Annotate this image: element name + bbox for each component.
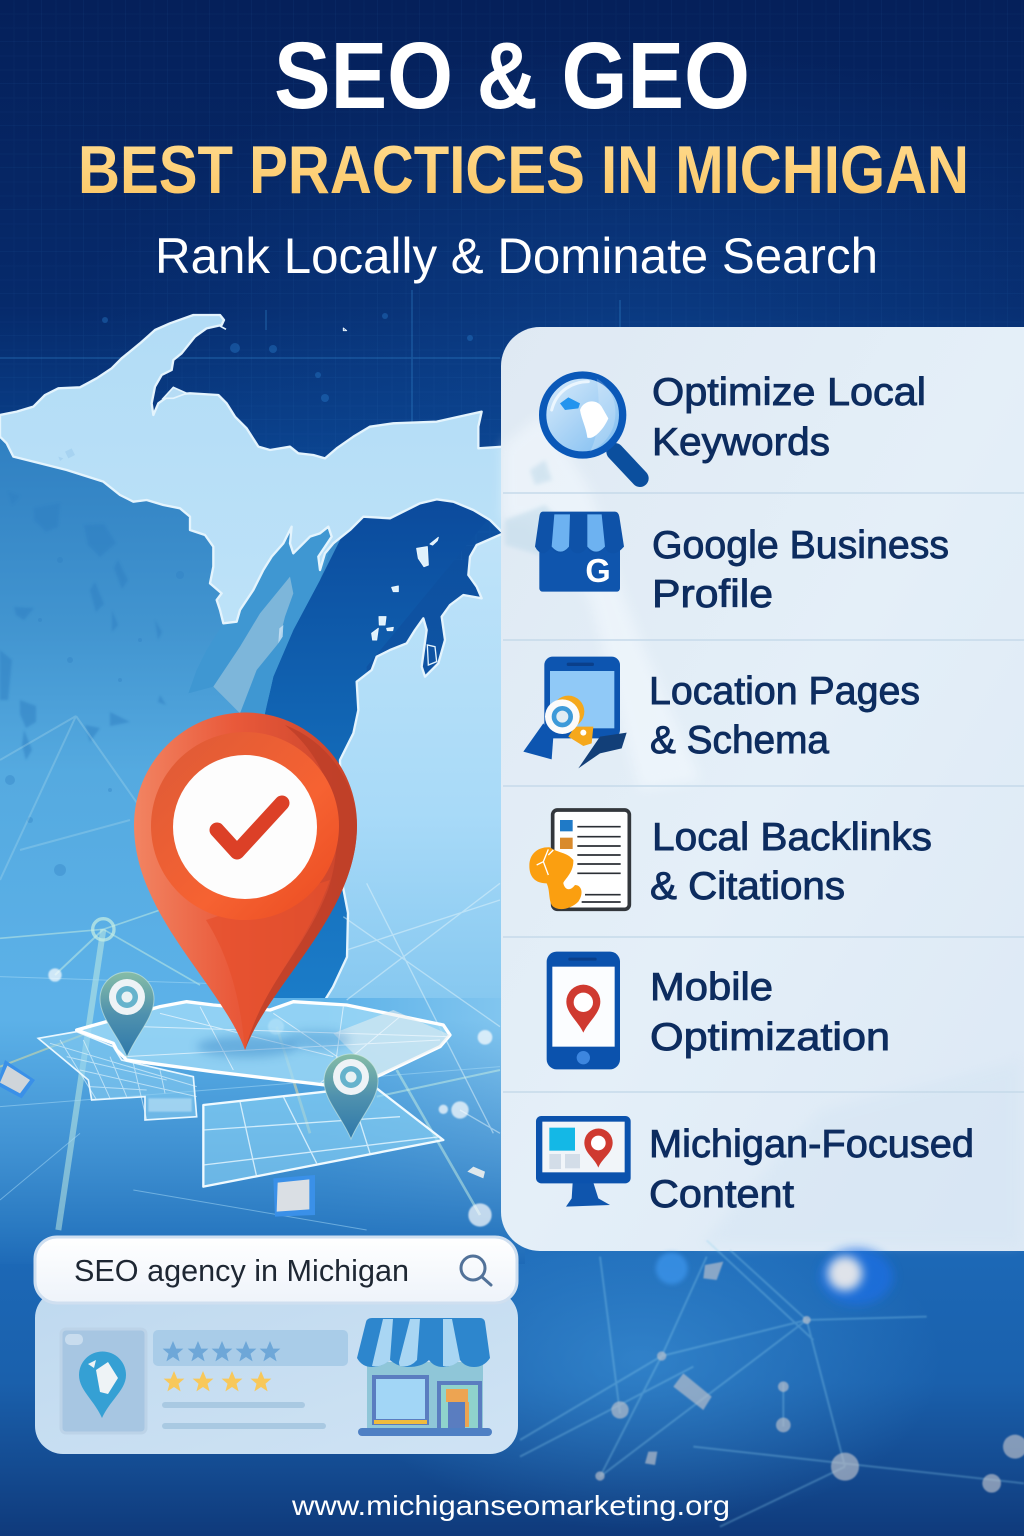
faint triangle lines on left land [0,716,170,880]
small pin: west [100,972,154,1057]
map: lake islands [343,328,438,640]
label: optimize local keywords [652,371,926,464]
small pin: east [324,1054,378,1139]
label: optimize local keywords: Optimize Local [652,371,926,414]
map: upper peninsula of Michigan [0,315,503,623]
placeholder text lines [162,1402,326,1429]
parcel: south grid [203,1088,443,1187]
search bar [35,1237,517,1303]
icon: document with orange map [529,810,629,909]
label: local backlinks and citations: Local Backlinks [652,816,932,859]
left land region below the upper peninsula [0,430,345,1002]
parcel: west grid [38,1032,197,1120]
bottom network decoration [520,1240,1024,1527]
title: SEO & GEO [274,23,750,129]
icon: smartphone with map pin [547,952,620,1069]
search bar: SEO agency in Michigan [74,1253,409,1288]
panel: best practices list [501,327,1024,1251]
blue rating stars [163,1341,280,1361]
large red map pin with check mark [134,712,357,1050]
icon: magnifying glass over map [543,375,640,478]
search result card [35,1290,518,1454]
icon: desktop monitor with map pin [536,1116,631,1207]
map: lower peninsula of Michigan [325,533,503,1000]
thumbnail with globe pin [61,1329,146,1433]
label: google business profile [652,524,949,616]
icon: google business store [535,512,624,592]
parcel: main highlighted area [77,1002,450,1085]
tagline: Rank Locally & Dominate Search [155,228,878,284]
label: location pages and schema: Location Pages [649,670,920,713]
lower map surface [0,998,525,1264]
icon: storefront [357,1318,492,1436]
label: michigan-focused content: Content [649,1173,794,1216]
lake michigan water [188,497,507,1000]
label: mobile optimization [650,966,890,1059]
label: location pages and schema: & Schema [650,719,829,762]
network lines and glowing nodes [0,883,500,1230]
icon: tablet with folded map and location marker [523,657,627,768]
gold rating stars [164,1371,271,1391]
map parcels [0,1002,485,1217]
label: local backlinks and citations [650,816,932,908]
label: location pages and schema [649,670,920,762]
label: mobile optimization: Mobile [650,966,773,1009]
label: michigan-focused content [649,1123,974,1216]
label: michigan-focused content: Michigan-Focused [649,1123,974,1166]
label: mobile optimization: Optimization [650,1016,890,1059]
label: google business profile: Google Business [652,524,949,567]
icon: google business store: G [585,553,611,590]
label: optimize local keywords: Keywords [652,421,830,464]
icon: search magnifier [461,1256,491,1285]
title [78,23,969,284]
floating tiles [0,1060,485,1217]
label: google business profile: Profile [652,573,773,616]
rating bar [153,1330,348,1366]
label: local backlinks and citations: & Citations [650,865,845,908]
check mark [217,803,282,852]
website url: www.michiganseomarketing.org [291,1490,730,1521]
